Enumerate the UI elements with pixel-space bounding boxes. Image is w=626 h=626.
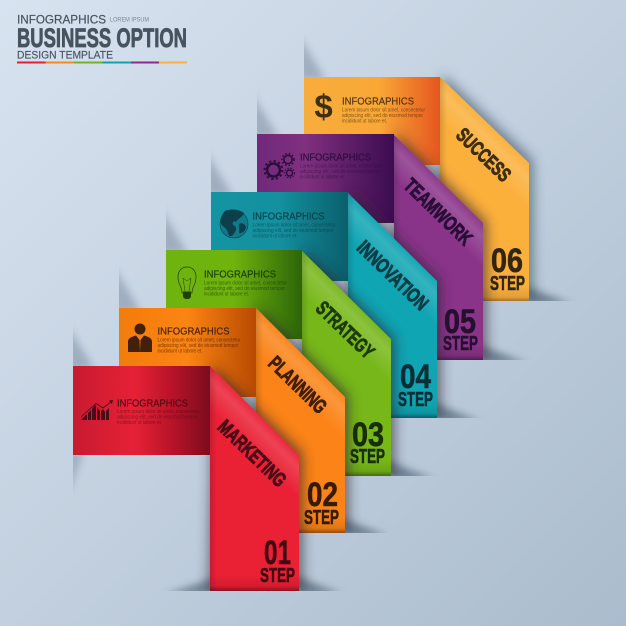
- icon: rising bar chart: [81, 400, 113, 420]
- step 01: marketing: [73, 364, 303, 591]
- icon: light bulb: [178, 267, 196, 299]
- panel text 03: INFOGRAPHICS: [204, 270, 276, 280]
- step label 04: STEP: [398, 389, 433, 411]
- panel 05: [257, 134, 394, 223]
- panel 04: [211, 192, 348, 281]
- fold 04: [348, 193, 437, 418]
- fold label: innovation: INNOVATION: [352, 237, 432, 315]
- step label 06: STEP: [490, 273, 525, 295]
- paper slit shadows: [67, 34, 573, 595]
- panel text 01: INFOGRAPHICS: [117, 398, 188, 410]
- fold label: strategy: STRATEGY: [311, 297, 379, 364]
- panel text 01: Lorem ipsum dolor sit amet, consectetur: [117, 409, 200, 415]
- icon: person: [128, 324, 152, 352]
- subtitle: lorem ipsum: LOREM IPSUM: [110, 16, 149, 24]
- number 04: 04: [400, 358, 431, 396]
- icon: dollar: $: [314, 88, 333, 125]
- title: infographics: INFOGRAPHICS: [17, 12, 106, 26]
- panel text 01: adipiscing elit, sed do eiusmod tempor: [117, 414, 198, 420]
- step 03: strategy: [166, 248, 395, 476]
- number 01: 01: [264, 534, 291, 572]
- number 02: 02: [307, 476, 338, 514]
- panel text 04: incididunt ut labore et.: [252, 234, 298, 240]
- panel text 02: INFOGRAPHICS: [158, 326, 230, 338]
- title: design template: DESIGN TEMPLATE: [17, 50, 113, 62]
- panel text 01: incididunt ut labore et.: [117, 420, 162, 426]
- panel text 04: INFOGRAPHICS: [252, 212, 325, 222]
- fold label: success: SUCCESS: [451, 124, 515, 187]
- panel text 06: [342, 96, 425, 124]
- panel 03: [166, 250, 302, 339]
- step label 03: STEP: [350, 446, 385, 468]
- step 04: innovation: [211, 190, 441, 418]
- panel text 05: [300, 152, 383, 180]
- panel text 06: adipiscing elit, sed do eiusmod tempor: [342, 113, 423, 119]
- panel text 04: [252, 212, 336, 240]
- fold label: teamwork: TEAMWORK: [399, 175, 477, 250]
- panel text 04: adipiscing elit, sed do eiusmod tempor: [252, 228, 334, 234]
- panel text 06: Lorem ipsum dolor sit amet, consectetur: [342, 108, 425, 114]
- step label 05: STEP: [443, 333, 478, 355]
- step label 02: STEP: [304, 507, 339, 529]
- panel text 02: [158, 326, 241, 354]
- panel 06: [304, 77, 440, 165]
- panel text 05: adipiscing elit, sed do eiusmod tempor: [300, 169, 381, 175]
- panel text 02: incididunt ut labore et.: [158, 348, 202, 354]
- fold label: planning: PLANNING: [264, 352, 331, 418]
- panel 02: [119, 308, 256, 397]
- panel text 05: INFOGRAPHICS: [300, 152, 371, 164]
- fold label: marketing: MARKETING: [213, 416, 290, 492]
- icon: gears: [264, 154, 294, 179]
- fold 06: [440, 77, 529, 301]
- step 02: planning: [119, 306, 349, 533]
- colour bar: [17, 62, 187, 64]
- panel text 06: INFOGRAPHICS: [342, 96, 414, 108]
- step 05: teamwork: [257, 132, 487, 360]
- number 03: 03: [352, 416, 384, 454]
- panel text 03: adipiscing elit, sed do eiusmod tempor: [204, 286, 285, 292]
- step label 01: STEP: [260, 565, 295, 587]
- fold 05: [394, 135, 483, 360]
- panel text 03: [204, 270, 287, 298]
- panel text 06: incididunt ut labore et.: [342, 118, 387, 124]
- panel text 03: Lorem ipsum dolor sit amet, consectetur: [204, 280, 287, 286]
- panel text 02: Lorem ipsum dolor sit amet, consectetur: [158, 338, 241, 344]
- panel text 03: incididunt ut labore et.: [204, 292, 249, 298]
- fold 01: [210, 366, 299, 591]
- icon: globe: [220, 210, 248, 238]
- panel text 01: [117, 398, 200, 426]
- panel text 04: Lorem ipsum dolor sit amet, consectetur: [252, 222, 336, 228]
- panel 01: [73, 366, 210, 455]
- number 05: 05: [444, 303, 476, 341]
- title block: [17, 12, 187, 64]
- step 06: success: [304, 74, 533, 301]
- panel text 05: incididunt ut labore et.: [300, 174, 345, 180]
- fold 02: [256, 308, 345, 533]
- number 06: 06: [491, 242, 523, 280]
- panel text 02: adipiscing elit, sed do eiusmod tempor: [158, 343, 239, 349]
- panel text 05: Lorem ipsum dolor sit amet, consectetur: [300, 164, 383, 170]
- fold 03: [302, 251, 391, 476]
- title: business option: BUSINESS OPTION: [17, 23, 187, 53]
